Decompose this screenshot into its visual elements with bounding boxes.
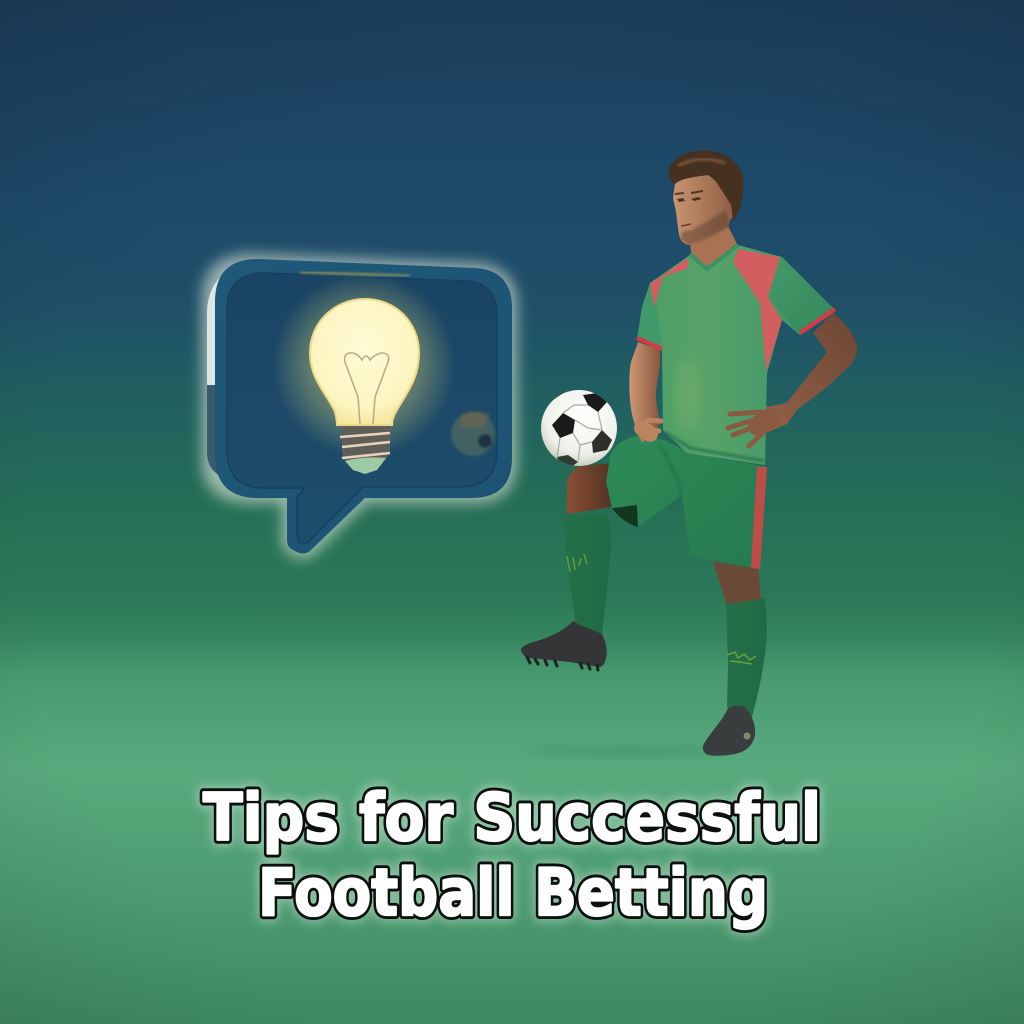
shirt red shoulder right xyxy=(733,249,782,372)
bulb filament xyxy=(345,353,389,424)
left hand xyxy=(642,420,661,434)
mouth xyxy=(681,224,691,226)
bubble glow xyxy=(207,259,512,554)
collar xyxy=(690,245,738,269)
raised sock logo xyxy=(567,554,587,572)
reflection tint xyxy=(460,412,490,428)
shirt highlight xyxy=(674,357,702,433)
lit inner top edge xyxy=(300,272,410,276)
bulb base xyxy=(342,425,390,473)
right arm xyxy=(760,313,857,432)
palm xyxy=(758,418,770,426)
title glow xyxy=(203,781,821,931)
raised thigh xyxy=(567,462,636,514)
standing sock logo xyxy=(727,652,756,664)
boot studs xyxy=(527,657,598,670)
ear xyxy=(728,196,738,220)
neck xyxy=(690,226,738,268)
reflection patch xyxy=(478,434,492,448)
bulb base tip xyxy=(345,457,386,474)
bubble inner panel xyxy=(227,273,497,544)
right hand xyxy=(728,412,770,446)
title outline xyxy=(203,781,821,931)
title fill: Tips for Successful xyxy=(203,781,821,856)
brow xyxy=(675,191,703,194)
bubble left white edge xyxy=(207,266,235,385)
title outline: Football Betting xyxy=(258,856,768,931)
ball seams xyxy=(557,405,602,462)
fingers xyxy=(728,412,766,446)
standing boot xyxy=(703,706,755,756)
hair xyxy=(668,150,743,222)
standing leg xyxy=(714,560,761,606)
shirt hem shadow xyxy=(665,432,764,461)
beard xyxy=(680,210,729,245)
standing sock xyxy=(726,598,767,717)
shorts fold xyxy=(660,445,682,495)
left sleeve xyxy=(637,284,662,350)
title fill: Football Betting xyxy=(258,856,768,931)
shorts underside xyxy=(612,503,638,527)
ball body xyxy=(541,390,617,466)
bubble left lower edge xyxy=(207,385,232,480)
football player xyxy=(521,150,857,756)
eye xyxy=(677,197,702,202)
bulb halo xyxy=(272,273,456,457)
title fill xyxy=(203,781,821,931)
head xyxy=(673,172,731,245)
title glow: Football Betting xyxy=(258,856,768,931)
title xyxy=(203,781,821,931)
bulb base threads xyxy=(340,433,390,458)
title outline: Tips for Successful xyxy=(203,781,821,856)
right sleeve xyxy=(768,257,835,335)
title glow: Tips for Successful xyxy=(203,781,821,856)
palm xyxy=(642,428,650,434)
shirt red shoulder left xyxy=(650,258,688,307)
raised lower sock xyxy=(565,513,611,637)
bulb glass xyxy=(310,299,419,425)
raised boot xyxy=(521,621,607,667)
standing boot badge xyxy=(744,732,750,740)
shorts xyxy=(606,435,767,569)
sleeve cuffs xyxy=(637,309,835,349)
reflection disc xyxy=(451,412,495,456)
bubble frame xyxy=(215,259,512,554)
shorts stripe xyxy=(751,467,767,569)
player ground shadow xyxy=(525,746,725,758)
speech bubble with lightbulb xyxy=(207,259,512,554)
ball patches xyxy=(552,393,612,466)
football xyxy=(541,390,617,468)
fingers xyxy=(648,420,661,431)
hair highlight xyxy=(678,159,725,166)
faint ball reflection xyxy=(451,412,495,456)
shirt xyxy=(637,245,835,465)
left arm xyxy=(629,342,660,443)
